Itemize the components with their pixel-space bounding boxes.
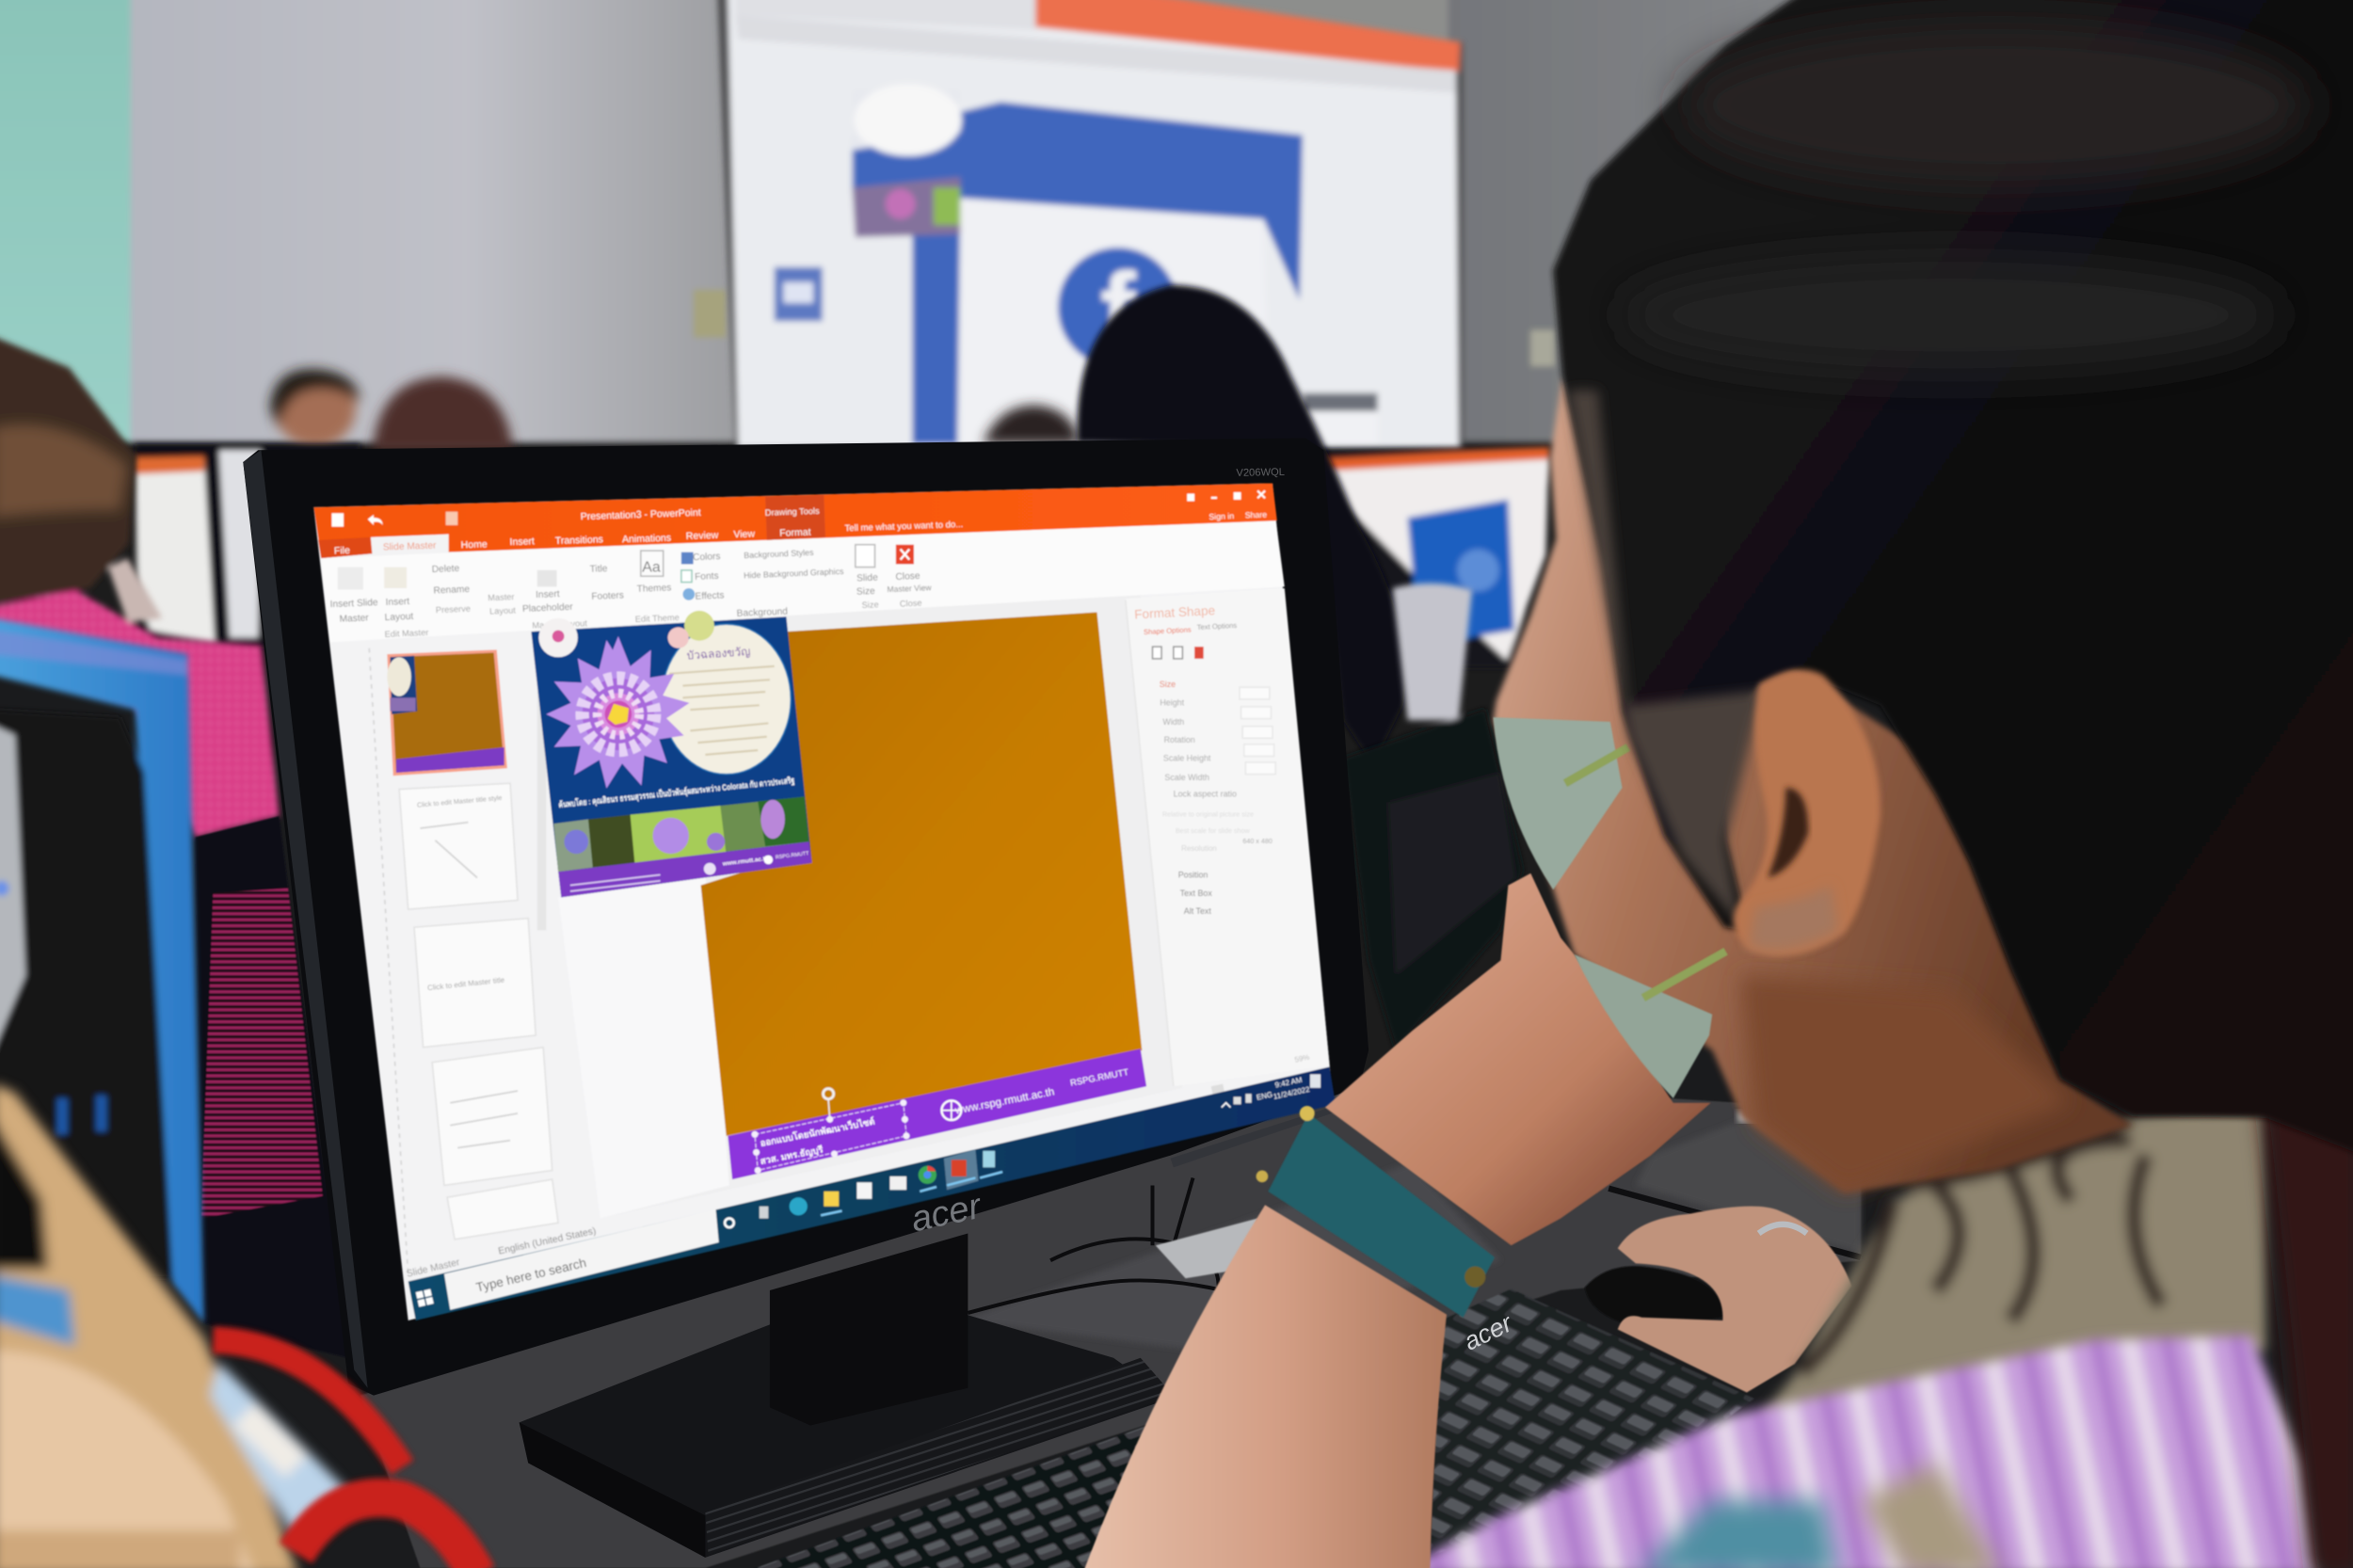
- format shape pane: Best scale for slide show: [1176, 827, 1250, 835]
- ribbon commands: Master: [488, 592, 515, 602]
- projector screen showing PowerPoint: [717, 0, 1464, 450]
- format shape pane: Text Options: [1196, 621, 1238, 632]
- dark hair: [1553, 0, 2353, 1156]
- slide footer band: [728, 1048, 1146, 1179]
- status bar: 59%: [1294, 1053, 1310, 1064]
- search box: [444, 1209, 719, 1310]
- slide thumbnails pane: Click to edit Master title: [427, 976, 505, 992]
- system tray: ENG: [1256, 1090, 1273, 1102]
- ribbon commands: Close: [895, 571, 920, 583]
- background woman's long dark hair: [1078, 285, 1406, 765]
- ribbon commands: Fonts: [695, 571, 719, 583]
- acer logo: acer: [907, 1185, 986, 1240]
- poster purple footer: [558, 841, 812, 897]
- drawing tools tab: [765, 495, 825, 540]
- chair: [195, 816, 348, 1358]
- dark maroon right side: [2259, 960, 2353, 1568]
- red strap: [213, 1340, 477, 1568]
- poster: blue lotus flyer: ค้นพบโดย : คุณสิธนร ธรรมสุวรรณ เป็นบัวพันธุ์ผสมระหว่าง Colorata กับ ดาวประเสริฐ: [558, 774, 795, 810]
- ribbon commands: Rename: [433, 584, 471, 597]
- title bar text: File: [334, 545, 350, 557]
- poster: blue lotus flyer: www.rmutt.ac.th: [721, 856, 769, 868]
- desk rail: [1609, 1189, 1861, 1257]
- ribbon commands: Hide Background Graphics: [744, 567, 844, 581]
- mouse: [1585, 1266, 1722, 1330]
- format shape pane: Lock aspect ratio: [1174, 790, 1237, 799]
- poster photo strip: [553, 797, 808, 872]
- format shape pane: Resolution: [1181, 844, 1217, 853]
- format shape pane: Alt Text: [1184, 906, 1211, 916]
- face mask: [1493, 717, 1726, 1098]
- keyboard: [735, 1288, 1754, 1568]
- PC tower and tote bag at lower left: [0, 618, 477, 1568]
- mouse and hand: [1585, 1189, 1861, 1392]
- projector screen showing PowerPoint: f: [1100, 251, 1137, 372]
- ribbon commands: Title: [589, 564, 608, 575]
- collar fabric: [1740, 1103, 2266, 1440]
- keyboard logo: acer: [1459, 1307, 1517, 1356]
- ribbon commands: Layout: [489, 605, 516, 616]
- slide thumbnails pane: [369, 648, 558, 1275]
- ribbon commands: Edit Master: [384, 628, 428, 639]
- ribbon commands: [329, 545, 933, 639]
- format shape pane: 640 x 480: [1242, 838, 1273, 845]
- ring: [1759, 1224, 1807, 1233]
- title bar text: Transitions: [555, 534, 603, 547]
- format shape pane: Relative to original picture size: [1162, 810, 1254, 818]
- format shape pane: Scale Height: [1163, 753, 1211, 762]
- ribbon commands: Insert: [385, 597, 410, 608]
- title bar text: Slide Master: [383, 540, 437, 552]
- format shape pane: Shape Options: [1144, 625, 1192, 636]
- title bar text: Home: [460, 538, 488, 551]
- format shape pane: Position: [1178, 871, 1208, 880]
- ribbon: [321, 518, 1285, 642]
- file tab: [318, 537, 372, 558]
- format shape pane: [1126, 588, 1330, 1086]
- power button strip: [1171, 1098, 1358, 1167]
- background: classroom wall: [0, 0, 2353, 1156]
- windows taskbar: 9:42 AM: [1274, 1076, 1303, 1090]
- format shape pane: Format Shape: [1134, 603, 1215, 621]
- ribbon commands: Close: [900, 599, 922, 609]
- slide footer band: www.rspg.rmutt.ac.th: [953, 1086, 1055, 1117]
- hand on mouse: [1618, 1207, 1851, 1392]
- taskbar icons: [725, 1219, 734, 1227]
- title bar text: View: [733, 528, 756, 540]
- title bar text: Share: [1245, 510, 1267, 520]
- ribbon commands: Layout: [384, 612, 414, 623]
- orange slide: [701, 612, 1142, 1136]
- ear: [1734, 669, 1881, 956]
- quick access icons and window buttons: [331, 490, 1265, 527]
- ribbon commands: Footers: [591, 590, 624, 602]
- slide footer band: ออกแบบโดยนักพัฒนาเว็บไซต์: [759, 1115, 875, 1149]
- format shape pane: Scale Width: [1164, 773, 1209, 782]
- windows taskbar: Type here to search: [474, 1256, 587, 1295]
- title bar text: Format: [779, 527, 811, 539]
- lotus flower: [546, 636, 692, 792]
- ribbon commands: Effects: [695, 590, 725, 602]
- ribbon commands: Aa: [642, 559, 661, 575]
- poster text: บัวฉลองขวัญ: [686, 645, 751, 663]
- blue PC tower: [0, 618, 204, 1323]
- screen white background: [313, 483, 1333, 1320]
- ribbon commands: Master View: [887, 583, 933, 594]
- cup and chair on the right: [1343, 584, 1523, 1050]
- status bar: [406, 1053, 1310, 1280]
- ribbon commands: Background Styles: [744, 548, 814, 560]
- screen: [313, 483, 1336, 1320]
- title bar text: Drawing Tools: [765, 506, 820, 518]
- ribbon commands: Master Layout: [532, 618, 587, 631]
- model label: V206WQL: [1236, 467, 1285, 479]
- windows taskbar: [408, 1067, 1336, 1320]
- blouse: [1389, 1336, 2318, 1568]
- workspace: [543, 594, 1182, 1219]
- format shape pane: Size: [1160, 680, 1176, 689]
- title bar text: Animations: [622, 533, 671, 545]
- slide footer band: สวส. มทร.ธัญบุรี: [760, 1144, 824, 1167]
- ribbon commands: Insert: [536, 589, 560, 600]
- title bar text: Insert: [509, 536, 535, 548]
- plastic bag: [0, 1083, 354, 1568]
- ribbon commands: Background: [736, 606, 789, 619]
- hand on cheek: [1325, 873, 1711, 1245]
- neck and face skin: [1493, 376, 2133, 1192]
- subtle hair sheen: [1621, 23, 2311, 376]
- teal wristband: [1257, 1106, 1495, 1318]
- monitor bezel: [243, 439, 1369, 1396]
- title bar text: [334, 506, 1267, 557]
- main monitor: [243, 439, 1369, 1396]
- format shape pane: Width: [1162, 717, 1184, 727]
- title bar text: Tell me what you want to do...: [844, 520, 963, 534]
- left classmate in pink: [0, 336, 280, 838]
- stand base: [520, 1313, 1171, 1558]
- ribbon commands: Insert Slide: [329, 598, 378, 610]
- desk surface: [360, 1080, 1861, 1568]
- ribbon commands: Size: [861, 600, 879, 610]
- neck shadow: [1740, 975, 2071, 1192]
- background monitors: [135, 444, 1552, 667]
- ribbon commands: Master: [339, 613, 370, 625]
- background classmates: [270, 369, 1080, 453]
- ribbon commands: Edit Theme: [634, 613, 680, 624]
- format shape pane: Rotation: [1164, 735, 1195, 744]
- windows logo: [416, 1288, 434, 1307]
- desk paper under cables: [1156, 1219, 1257, 1278]
- ribbon commands: Slide: [856, 572, 878, 584]
- right keyboard section: [1430, 1288, 1754, 1556]
- ribbon commands: Themes: [636, 583, 672, 595]
- title bar text: Presentation3 - PowerPoint: [581, 507, 701, 522]
- slide thumbnails pane: Click to edit Master title style: [417, 794, 503, 809]
- ribbon commands: Size: [856, 586, 875, 598]
- title bar text: Review: [686, 530, 719, 542]
- format shape pane: Height: [1160, 697, 1185, 707]
- sideburn thin hair: [1568, 391, 1763, 927]
- title bar: [313, 483, 1277, 558]
- left keyboard section: [735, 1422, 1186, 1568]
- windows taskbar: 11/24/2022: [1273, 1085, 1311, 1101]
- status bar: English (United States): [497, 1226, 597, 1257]
- lower forearm: [1082, 1205, 1447, 1568]
- title bar text: Sign in: [1209, 511, 1234, 521]
- poster: blue lotus flyer: RSPG.RMUTT: [776, 851, 810, 860]
- status bar: Slide Master: [406, 1257, 461, 1280]
- ribbon commands: Delete: [431, 564, 460, 575]
- format shape pane: Text Box: [1180, 888, 1212, 898]
- ribbon commands: Preserve: [436, 604, 471, 615]
- stand neck: [770, 1233, 968, 1426]
- woman in the foreground: [1082, 0, 2353, 1568]
- poster: blue lotus flyer: [531, 611, 812, 897]
- poster circle panel: [662, 624, 791, 775]
- cables behind the monitor: [968, 1177, 1223, 1313]
- ribbon commands: Colors: [693, 552, 721, 563]
- slide footer band: RSPG.RMUTT: [1069, 1067, 1129, 1089]
- ribbon commands: Placeholder: [522, 602, 574, 615]
- monitor stand and base: [520, 1233, 1174, 1558]
